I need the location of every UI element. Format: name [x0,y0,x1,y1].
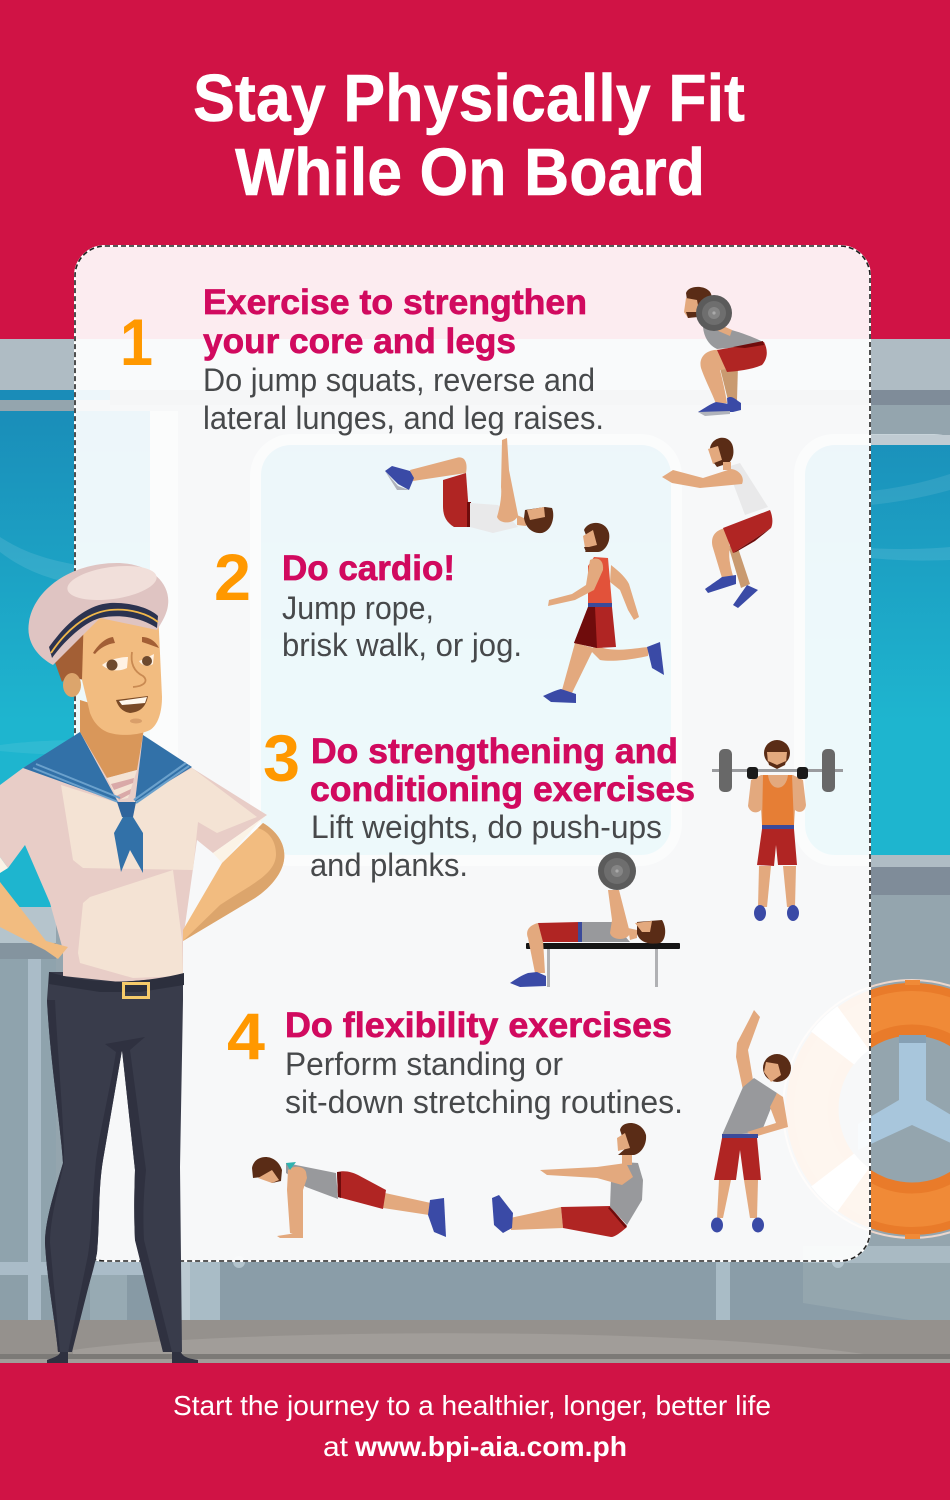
body text 4: sit-down stretching routines. [285,1084,683,1120]
footer text: www.bpi-aia.com.ph [354,1431,627,1462]
body text 4: Perform standing or [285,1046,563,1082]
figure: jump squat arms forward [662,438,772,608]
footer text: at [323,1431,348,1462]
footer text [173,1390,771,1462]
number 1: 1 [120,305,153,379]
heading 1: your core and legs [203,322,516,361]
top red banner [0,0,950,339]
figure: squat with weight plate [684,287,767,416]
section 1: strengthen core and legs [120,283,604,436]
body text 2 [282,590,522,663]
figure: plank push-up [252,1157,446,1238]
shirt [0,735,267,982]
heading 4: Do flexibility exercises [285,1006,672,1045]
trousers [45,972,198,1363]
lower left wall panels [0,907,950,1320]
head [53,610,162,735]
body text 2: brisk walk, or jog. [282,627,522,663]
arms [0,823,284,959]
heading 3: conditioning exercises [310,770,695,809]
number 2: 2 [214,540,251,614]
title: Stay Physically Fit [193,61,745,136]
title: While On Board [235,135,705,210]
heading 3 [310,732,695,809]
body text 1: lateral lunges, and leg raises. [203,400,604,436]
bottom red banner [0,1363,950,1500]
number 4: 4 [227,999,265,1073]
figure: standing side bend [711,1010,791,1232]
figure: standing barbell curl [712,740,843,921]
title [193,61,745,210]
body text 2: Jump rope, [282,590,434,626]
body text 4 [285,1046,683,1120]
section 2: cardio [214,540,522,663]
right window [794,434,950,895]
heading 1: Exercise to strengthen [203,283,587,322]
figure: seated twist arms forward [492,1123,646,1237]
body text 3 [310,809,662,883]
figure: bench press [510,852,680,987]
number 3: 3 [263,721,300,795]
body text 3: and planks. [310,847,468,883]
heading 3: Do strengthening and [311,732,678,771]
body text 1: Do jump squats, reverse and [203,362,595,398]
section 3: strengthening and conditioning [263,721,695,883]
neck and undershirt [80,700,145,800]
footer text: Start the journey to a healthier, longer, better life [173,1390,771,1421]
figure: runner [543,523,664,703]
panel: translucent exercise card [75,246,870,1261]
centre window [250,434,682,866]
heading 1 [203,283,587,361]
sailor hat [28,561,168,665]
left window [0,411,178,931]
body text 3: Lift weights, do push-ups [311,809,662,845]
background: ship wall [0,339,950,1363]
belt [49,972,184,998]
figure: crunch with raised arm [385,438,553,533]
section 4: flexibility [227,999,683,1120]
sailor character [0,561,284,1363]
heading 2: Do cardio! [282,549,455,588]
body text 1 [203,362,604,436]
life buoy [783,980,950,1239]
deck floor [0,1320,950,1363]
collar [23,732,192,873]
